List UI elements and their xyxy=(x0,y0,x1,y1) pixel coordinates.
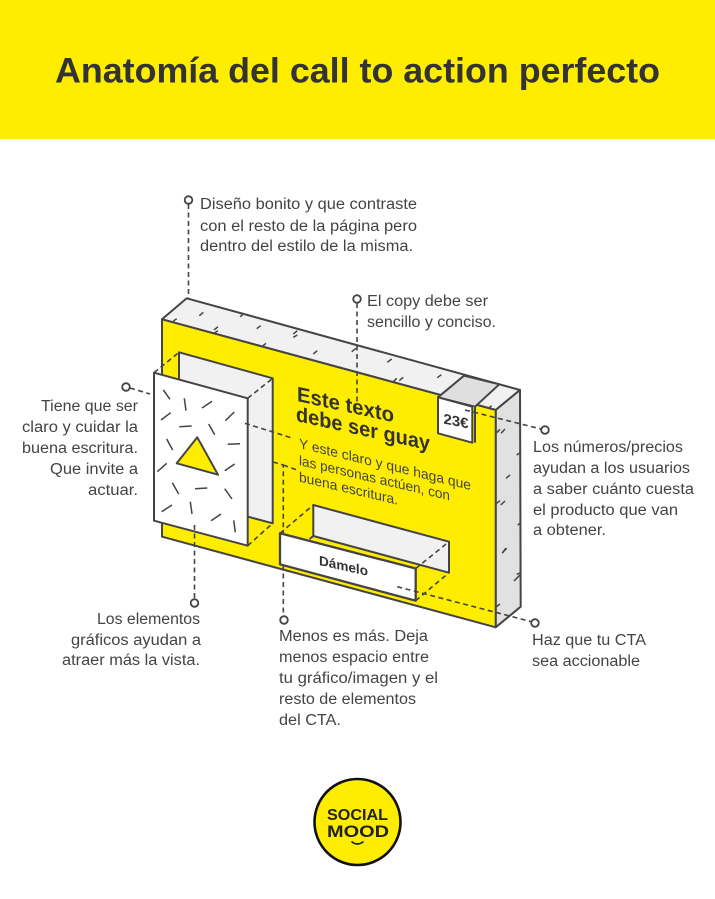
body copy: buena escritura. xyxy=(299,470,398,509)
side face with speckles xyxy=(496,390,521,627)
button xyxy=(280,533,416,601)
callout: prices: el producto que van xyxy=(533,502,678,519)
callout: writing xyxy=(22,383,293,499)
callout: less is more xyxy=(273,462,438,729)
callout: less is more: tu gráfico/imagen y el xyxy=(279,670,438,687)
headline text xyxy=(296,382,430,455)
body copy: las personas actúen, con xyxy=(299,453,450,504)
callout: prices: a obtener. xyxy=(533,522,606,539)
callout: graphic elements xyxy=(62,525,201,669)
callout: copy: sencillo y conciso. xyxy=(367,314,496,331)
callout: prices xyxy=(465,410,694,539)
callout: design xyxy=(185,196,417,298)
callout: writing: Que invite a xyxy=(50,461,138,478)
confetti marks xyxy=(157,390,240,532)
callout: writing: Tiene que ser xyxy=(41,398,138,415)
callout: design: dentro del estilo de la misma. xyxy=(200,238,413,255)
callout: graphic elements: Los elementos xyxy=(97,611,200,628)
graphic card xyxy=(154,373,248,546)
front yellow face xyxy=(162,319,496,627)
callout: writing: buena escritura. xyxy=(22,440,138,457)
callout: copy xyxy=(353,293,496,402)
triangle icon xyxy=(177,437,218,475)
price tag: 23€ xyxy=(444,412,469,432)
button: Dámelo xyxy=(319,553,368,579)
card recess xyxy=(154,352,273,546)
title: Anatomía del call to action perfecto xyxy=(55,52,660,90)
callout: prices: a saber cuánto cuesta xyxy=(533,481,694,498)
callout: less is more: del CTA. xyxy=(279,712,341,729)
button recess xyxy=(280,505,449,601)
callout: prices: ayudan a los usuarios xyxy=(533,460,690,477)
header band xyxy=(0,0,715,139)
callout: less is more: Menos es más. Deja xyxy=(279,628,428,645)
price tag recess xyxy=(438,376,499,407)
logo: Social Mood: MOOD xyxy=(327,822,389,841)
callout: actionable: sea accionable xyxy=(532,653,640,670)
callout: writing: claro y cuidar la xyxy=(22,419,138,436)
logo: Social Mood: SOCIAL xyxy=(327,807,388,824)
top face with speckles xyxy=(162,298,520,410)
callout: less is more: menos espacio entre xyxy=(279,649,429,666)
callout: prices: Los números/precios xyxy=(533,439,683,456)
callout: graphic elements: atraer más la vista. xyxy=(62,652,200,669)
illustration: call to action box xyxy=(154,298,521,627)
callout: copy: El copy debe ser xyxy=(367,293,488,310)
headline text: debe ser guay xyxy=(296,402,430,455)
callout: less is more: resto de elementos xyxy=(279,691,416,708)
price tag xyxy=(438,397,475,443)
logo: Social Mood xyxy=(314,779,400,865)
callout: graphic elements: gráficos ayudan a xyxy=(71,632,201,649)
callout: design: con el resto de la página pero xyxy=(200,218,417,235)
headline text: Este texto xyxy=(297,382,394,427)
callout: writing: actuar. xyxy=(88,482,138,499)
callout: actionable xyxy=(397,587,647,670)
callout: design: Diseño bonito y que contraste xyxy=(200,196,417,213)
callout: actionable: Haz que tu CTA xyxy=(532,632,647,649)
body copy: Y este claro y que haga que xyxy=(299,436,471,494)
